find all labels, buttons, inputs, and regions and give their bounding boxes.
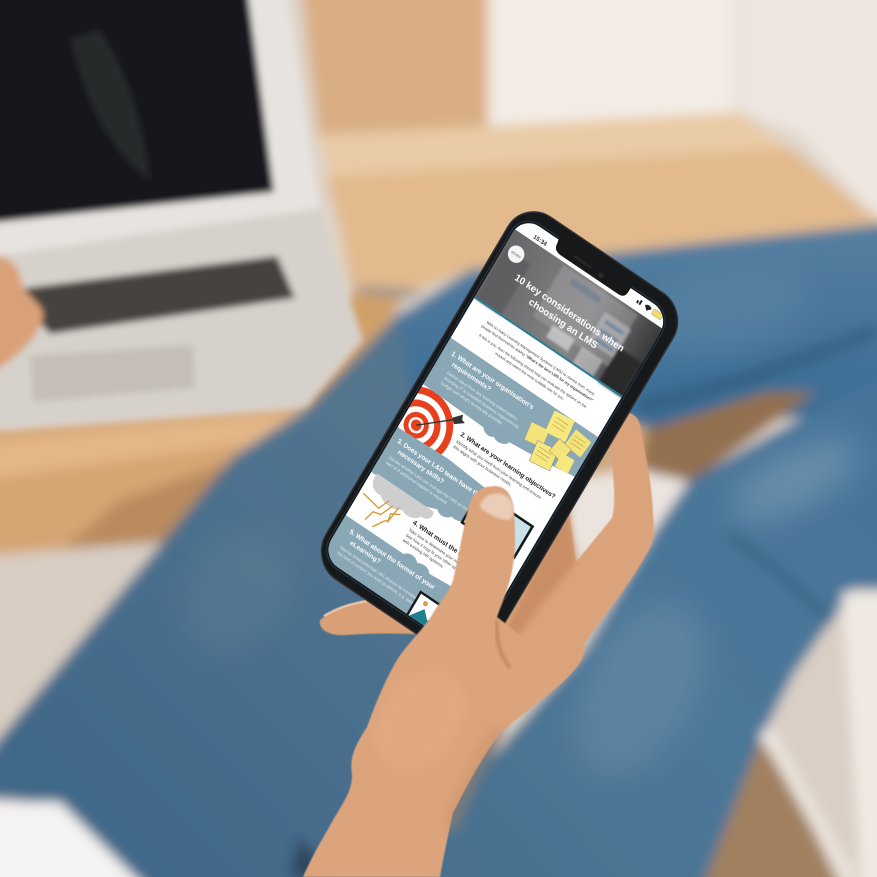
right wall xyxy=(738,0,877,240)
section 1 text: 1. What are your organisation's xyxy=(450,350,535,411)
finger: middle shadow xyxy=(500,505,576,640)
section 1 text xyxy=(441,352,534,430)
cork panel xyxy=(300,0,490,136)
thumb and palm xyxy=(303,486,565,877)
icon: target with arrow xyxy=(386,386,465,454)
jeans: soft highlights and folds xyxy=(159,252,877,877)
dark wood behind knee xyxy=(640,392,815,482)
chair: white bar xyxy=(842,592,877,877)
section 1 text: budget and what's technically possible. xyxy=(440,380,504,426)
section 2 text: this aligns with your business needs. xyxy=(452,444,513,487)
section 4 text: Take time to determine your must-haves. xyxy=(408,527,475,575)
intro text: market and select the most suitable one for you. xyxy=(494,351,566,401)
tan wood in gap xyxy=(580,415,650,478)
intro text: people find themselves asking "What's the best LMS for my organisation?" xyxy=(480,323,595,403)
white shirt xyxy=(0,802,155,877)
finger: left lower xyxy=(320,597,430,635)
laptop base xyxy=(0,208,363,430)
status bar: time: 15:34 xyxy=(532,234,548,248)
section 3 text: Decide whether L&D can manage the LMS on their xyxy=(388,455,471,514)
title: choosing an LMS xyxy=(526,297,600,352)
icon: picture frame xyxy=(406,590,440,626)
section 2 text: Identify what you need from your learning and ensure xyxy=(455,439,543,500)
section 5 text: the kind of content you want to deliver, e.g. videos. xyxy=(336,550,419,608)
shelf surface xyxy=(325,148,877,297)
light gap right of phone xyxy=(565,420,690,590)
icon: laptop xyxy=(462,491,533,558)
status bar: icons xyxy=(636,300,662,320)
header teal rule xyxy=(474,296,623,398)
section 3 text: 3. Does your L&D team have the xyxy=(396,438,483,500)
section 5 text: eLearning? xyxy=(348,540,381,566)
gray strip behind thigh xyxy=(355,285,425,300)
hand: fingers behind phone xyxy=(320,413,654,733)
panel: section 3 band xyxy=(371,427,485,522)
jeans: upper thigh xyxy=(395,222,877,500)
section 4 text xyxy=(402,521,460,570)
floor bottom right xyxy=(698,740,845,877)
icon: sticky notes xyxy=(524,410,592,474)
laptop xyxy=(0,0,363,430)
phone notch xyxy=(552,235,633,298)
panel: section 5 band xyxy=(328,515,452,618)
section 3 text: own or if additional support is required. xyxy=(385,460,449,506)
white wall panel xyxy=(488,0,735,128)
intro text: With so many Learning Management Systems (LMS) to choose from, many xyxy=(486,320,596,396)
chair: beige panel xyxy=(760,589,877,877)
thumb nail xyxy=(480,494,513,520)
keyboard xyxy=(10,256,295,334)
section 5 text: Narrow down potential LMS choices by considering xyxy=(339,545,423,604)
finger: index and back of palm xyxy=(490,413,654,733)
logo: eCom xyxy=(510,249,522,260)
section 1 text: Gather input from key learning stakeholders, xyxy=(446,370,519,422)
hand: thumb and palm in front of phone xyxy=(303,486,565,877)
section 2 text: 2. What are your learning objectives? xyxy=(459,431,557,501)
jeans: lower leg xyxy=(420,370,877,877)
trackpad xyxy=(30,345,195,402)
title: 10 key considerations when xyxy=(512,272,626,355)
phone xyxy=(320,211,678,635)
laptop lid xyxy=(0,0,320,262)
wrist shading xyxy=(450,728,500,830)
section 4 text: See how it may fit your other systems xyxy=(405,532,467,577)
palm crease xyxy=(497,620,510,668)
back of hand highlight xyxy=(356,652,484,788)
phone body xyxy=(310,199,689,673)
section 5 text: 5. What about the format of your xyxy=(348,529,436,592)
floor xyxy=(0,542,162,765)
panel: section 1 band xyxy=(420,338,598,489)
section 4 text: 4. What must the system do? xyxy=(411,519,491,577)
intro text: If this is you, then the following should help you evaluate the options on the xyxy=(478,333,588,409)
wood table xyxy=(0,290,400,558)
laptop screen xyxy=(0,0,274,224)
section 3 text: necessary skills? xyxy=(396,449,445,486)
logo xyxy=(508,246,524,263)
typing hand xyxy=(0,255,43,378)
section 1 text: including IT to establish business requirements, xyxy=(443,375,521,430)
section 4 text: with existing HR systems. xyxy=(402,538,445,569)
jeans: main leg xyxy=(0,310,540,877)
icon: grey cloud xyxy=(372,474,434,519)
phone screen xyxy=(328,223,664,626)
icon: orange circuit lines xyxy=(362,492,400,528)
section 1 text: requirements? xyxy=(450,361,492,393)
header image xyxy=(474,229,662,398)
shelf lip xyxy=(318,112,790,178)
